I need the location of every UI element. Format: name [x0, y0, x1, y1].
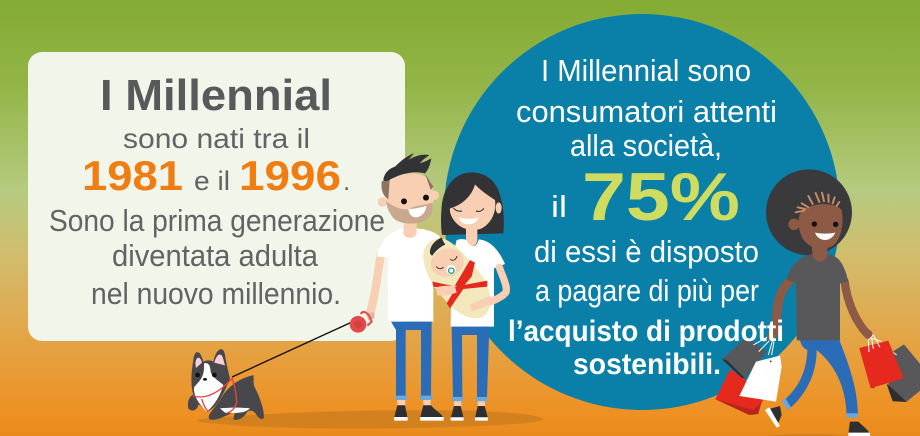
leash	[232, 322, 352, 377]
bag: grey right	[887, 344, 920, 402]
woman trousers	[452, 327, 489, 397]
intro lines: il	[551, 189, 567, 224]
shopper eyes	[812, 221, 817, 227]
shopper ear	[788, 219, 800, 230]
intro lines	[516, 53, 777, 224]
shopper smile	[815, 233, 835, 240]
panel: blue circle	[444, 14, 840, 410]
man shoes	[394, 405, 444, 421]
text: first generation: nel nuovo millennio.	[91, 276, 341, 311]
shopper trousers	[783, 340, 858, 416]
intro lines: consumatori attenti	[516, 94, 777, 129]
follow-up lines	[534, 234, 759, 308]
woman t-shirt	[451, 239, 505, 327]
birth years line: 1981	[82, 152, 183, 199]
bag: red right	[859, 335, 904, 388]
woman neck	[466, 227, 477, 246]
text: first generation: diventata adulta	[112, 238, 319, 273]
woman right arm	[472, 267, 506, 308]
illustration: woman with baby	[423, 172, 506, 421]
birth years line	[82, 152, 350, 199]
man ankles	[397, 400, 431, 407]
intro lines: I Millennial sono	[541, 53, 751, 88]
icon: dog	[188, 349, 264, 424]
man hair	[383, 153, 431, 181]
panel background	[28, 52, 405, 341]
illustration: shopper with bags	[715, 169, 920, 436]
man trousers	[391, 322, 432, 397]
birth years line: .	[343, 166, 350, 196]
follow-up lines: a pagare di più per	[535, 273, 759, 308]
bag: white left	[739, 356, 782, 402]
birth years line: e il	[194, 166, 230, 196]
text: consumers statement	[508, 53, 784, 381]
birth years line: 1996	[239, 152, 341, 199]
man ears	[378, 197, 387, 207]
shopper neck	[812, 245, 827, 262]
woman hair	[441, 172, 504, 235]
panel: who the Millennials are	[28, 52, 405, 341]
woman ankles	[454, 401, 485, 407]
man cuffs	[395, 396, 432, 400]
baby ribbon	[432, 260, 487, 308]
baby face	[428, 245, 467, 280]
shopper right hand	[864, 330, 872, 338]
shopper t-shirt	[787, 254, 848, 340]
man beard	[386, 201, 433, 224]
bag: red left	[715, 369, 763, 415]
shopper face	[798, 204, 842, 249]
text: first generation	[49, 203, 385, 311]
baby blanket	[423, 239, 490, 318]
shopper afro	[766, 169, 852, 255]
woman smile	[459, 217, 479, 224]
woman forearm	[470, 296, 495, 312]
man neck	[403, 222, 417, 238]
heading: I Millennial: I Millennial	[100, 71, 332, 120]
text: sono nati tra il: sono nati tra il	[123, 123, 310, 154]
man hand	[366, 313, 374, 321]
man smile	[408, 206, 426, 217]
text: first generation: Sono la prima generazione	[49, 203, 385, 238]
shopper cuffs	[782, 398, 858, 418]
woman face	[450, 184, 495, 230]
shopper right arm	[845, 282, 868, 335]
follow-up lines: di essi è disposto	[534, 234, 759, 269]
icon: leash reel	[350, 312, 372, 333]
emphasis lines: l’acquisto di prodotti	[508, 315, 784, 348]
woman shoes	[451, 406, 488, 421]
man t-shirt	[377, 228, 440, 322]
baby pacifier	[446, 265, 456, 274]
man arm	[370, 255, 381, 313]
woman ear	[496, 202, 502, 214]
woman left hand	[436, 286, 457, 296]
man side hair	[381, 173, 433, 199]
shopper left hand	[767, 332, 776, 341]
shopper shadow	[762, 434, 852, 436]
baby eyes	[436, 256, 457, 269]
shopper hair strands	[796, 193, 839, 212]
intro lines: alla società,	[570, 128, 722, 163]
baby hair	[430, 238, 445, 256]
woman cuffs	[452, 397, 487, 401]
bag: grey left	[722, 337, 767, 378]
illustration: man	[350, 153, 444, 421]
man eyes	[401, 198, 407, 204]
man head	[386, 173, 433, 223]
bag handles	[753, 337, 774, 355]
statistic: 75%: 75%	[582, 159, 740, 235]
shopper left arm	[772, 282, 789, 337]
emphasis lines: sostenibili.	[573, 348, 721, 381]
ground shadow	[197, 410, 543, 429]
emphasis lines	[508, 315, 784, 381]
shopper shoes	[765, 406, 870, 436]
woman eyes	[454, 208, 484, 211]
